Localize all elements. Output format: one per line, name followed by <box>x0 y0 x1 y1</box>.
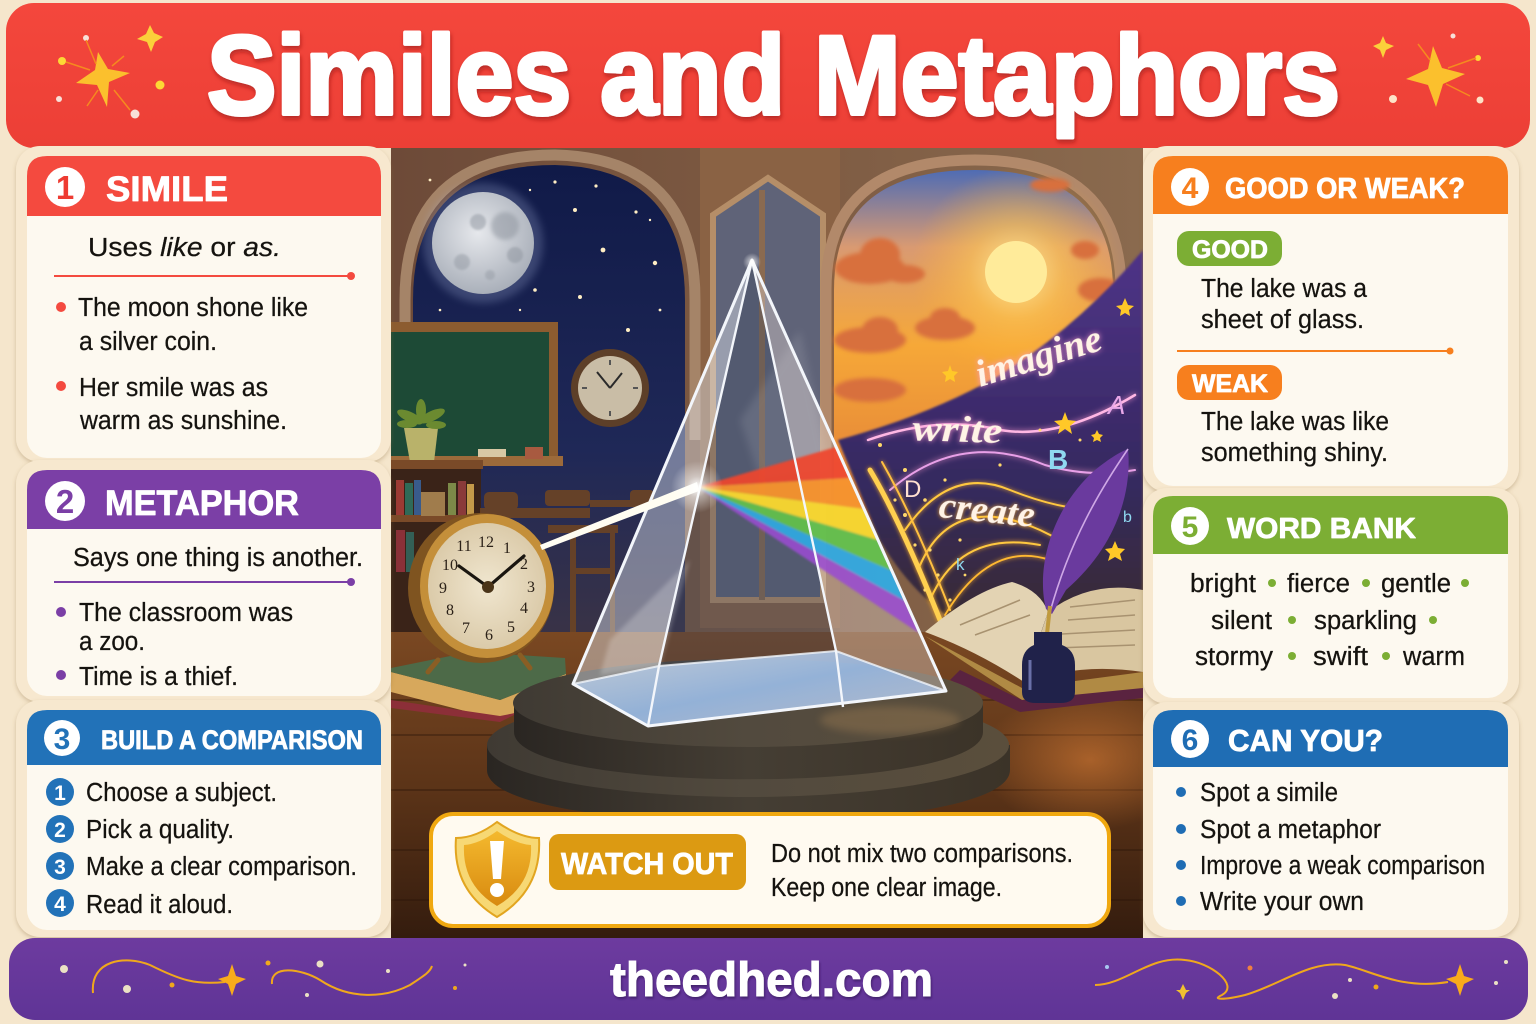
right decoration <box>1095 959 1508 1000</box>
word list: silent <box>1211 607 1272 635</box>
checklist: Improve a weak comparison <box>1200 852 1485 880</box>
gold stars <box>942 298 1134 561</box>
purple magic banner <box>838 250 1143 640</box>
panel: 2 metaphor <box>16 460 391 702</box>
example list: Her smile was as <box>79 374 268 402</box>
alarm clock: 5 <box>507 619 515 636</box>
steps list: 1 <box>54 782 66 805</box>
alarm clock: 10 <box>442 557 458 574</box>
stars <box>428 178 662 332</box>
example list: Time is a thief. <box>79 663 238 691</box>
rainbow <box>697 447 919 633</box>
light beam <box>540 461 723 550</box>
heading: GOOD OR WEAK? <box>1225 173 1465 205</box>
word list: swift <box>1313 643 1368 671</box>
icon: sun <box>985 241 1047 303</box>
floating words: create <box>937 485 1037 536</box>
warning text: Do not mix two comparisons. <box>771 840 1073 868</box>
checklist: Spot a simile <box>1200 779 1338 807</box>
word list: gentle <box>1381 570 1451 598</box>
sparkle dots <box>878 428 1082 602</box>
good example: sheet of glass. <box>1201 306 1364 334</box>
panel header: can you <box>1153 710 1508 767</box>
potted plant <box>395 399 447 462</box>
night window with moon <box>405 155 695 640</box>
book stack under clock <box>391 652 566 722</box>
glass prism <box>573 253 946 726</box>
divider <box>54 578 355 586</box>
example list <box>56 294 308 435</box>
alarm clock: 4 <box>520 600 528 617</box>
alarm clock: 8 <box>446 602 454 619</box>
weak example: something shiny. <box>1201 439 1388 467</box>
ink bottle and quill <box>1022 449 1129 703</box>
steps list: 2 <box>54 819 66 842</box>
number badge 1: 1 <box>56 169 74 206</box>
good example: GOOD <box>1192 236 1268 264</box>
word list: stormy <box>1195 643 1273 671</box>
left decoration <box>60 960 466 997</box>
heading: CAN YOU? <box>1228 723 1383 758</box>
floating words: write <box>912 408 1003 452</box>
steps list: Make a clear comparison. <box>86 853 357 881</box>
website: theedhed.com <box>610 954 933 1007</box>
icon: warning shield <box>456 822 539 917</box>
panel: title banner <box>6 3 1530 148</box>
centre pointed window <box>700 148 840 628</box>
checklist <box>1176 779 1485 916</box>
panel header: word bank <box>1153 496 1508 554</box>
chalkboard <box>391 322 563 466</box>
checklist: Spot a metaphor <box>1200 816 1381 844</box>
warning text <box>771 840 1073 902</box>
warning text: Keep one clear image. <box>771 874 1002 902</box>
heading: METAPHOR <box>105 484 299 523</box>
floating words: B <box>1048 444 1068 475</box>
good example: The lake was a <box>1201 275 1368 303</box>
classroom wall <box>391 148 1143 648</box>
icon: right stars <box>1373 34 1484 107</box>
panel: 1 simile <box>16 146 391 462</box>
word list: fierce <box>1287 570 1350 598</box>
open book <box>925 582 1143 712</box>
floating words: A <box>1106 390 1125 420</box>
alarm clock: 11 <box>456 538 472 555</box>
example list: a zoo. <box>79 628 145 656</box>
word list: bright <box>1190 570 1256 598</box>
icon: moon <box>432 192 534 294</box>
heading: BUILD A COMPARISON <box>101 725 363 755</box>
checklist: Write your own <box>1200 888 1364 916</box>
desks and chairs <box>480 490 654 643</box>
weak example: The lake was like <box>1201 408 1389 436</box>
prism edges <box>573 260 946 726</box>
example list: warm as sunshine. <box>79 407 287 435</box>
clouds <box>834 178 1122 402</box>
callout: watch out <box>431 814 1109 926</box>
floating words: k <box>956 555 965 574</box>
panel: 6 can you <box>1143 702 1519 937</box>
weak example: WEAK <box>1192 370 1268 398</box>
floating words: b <box>1123 509 1132 526</box>
panel: footer banner <box>9 938 1528 1020</box>
good example <box>1177 231 1368 334</box>
example list: The classroom was <box>79 599 293 627</box>
example list <box>56 599 293 691</box>
word list <box>1190 570 1469 671</box>
floating words: D <box>904 476 921 503</box>
day window with sun and clouds <box>826 160 1122 520</box>
alarm clock: 2 <box>520 556 528 573</box>
wooden table <box>391 632 1200 938</box>
divider <box>1177 348 1454 354</box>
panel: 3 build a comparison <box>16 700 391 937</box>
panel: 5 word bank <box>1143 488 1519 704</box>
heading: WORD BANK <box>1227 513 1416 545</box>
steps list: 3 <box>54 856 66 879</box>
definition: Uses like or as. <box>88 234 281 262</box>
floating words <box>904 317 1132 574</box>
word list: sparkling <box>1314 607 1417 635</box>
wall clock <box>571 349 649 427</box>
panel: 4 good or weak <box>1143 146 1519 492</box>
number badge 5: 5 <box>1182 511 1198 544</box>
number badge 6 <box>1171 720 1209 758</box>
alarm clock: 7 <box>462 620 470 637</box>
steps list: Pick a quality. <box>86 816 234 844</box>
steps list: Read it aloud. <box>86 891 233 919</box>
stone pedestal <box>487 659 1010 822</box>
badge: watch out: WATCH OUT <box>561 846 733 881</box>
weak example <box>1177 365 1389 467</box>
steps list: 4 <box>54 893 66 916</box>
alarm clock: 12 <box>478 534 494 551</box>
number badge 2 <box>45 481 85 521</box>
example list: The moon shone like <box>78 294 308 322</box>
title: Similes and Metaphors <box>207 13 1340 138</box>
number badge 6: 6 <box>1182 724 1198 757</box>
alarm clock: 3 <box>527 579 535 596</box>
icon: left stars <box>56 25 164 118</box>
panel header: metaphor <box>27 470 381 529</box>
number badge 3 <box>44 720 80 756</box>
floating words: imagine <box>970 317 1107 396</box>
alarm clock: 1 <box>503 540 511 557</box>
word list: warm <box>1402 643 1465 671</box>
number badge 4: 4 <box>1182 172 1199 205</box>
definition: Says one thing is another. <box>73 544 363 572</box>
alarm clock: 6 <box>485 627 493 644</box>
central illustration: prism scene <box>391 148 1200 938</box>
number badge 5 <box>1171 507 1209 545</box>
number badge 3: 3 <box>54 723 70 756</box>
panel header: good or weak <box>1153 156 1508 214</box>
divider <box>54 272 355 280</box>
heading: SIMILE <box>106 170 228 209</box>
number badge 2: 2 <box>56 483 74 520</box>
badge: watch out <box>549 834 746 890</box>
alarm clock: 9 <box>439 580 447 597</box>
bookshelf <box>391 460 483 640</box>
steps list: Choose a subject. <box>86 779 277 807</box>
number badge 1 <box>45 167 85 207</box>
example list: a silver coin. <box>79 328 217 356</box>
number badge 4 <box>1171 168 1209 206</box>
panel header: simile <box>27 156 381 216</box>
panel header: build <box>27 710 381 765</box>
steps list <box>46 778 357 919</box>
magic swirls <box>868 395 1135 620</box>
alarm clock <box>408 513 554 672</box>
